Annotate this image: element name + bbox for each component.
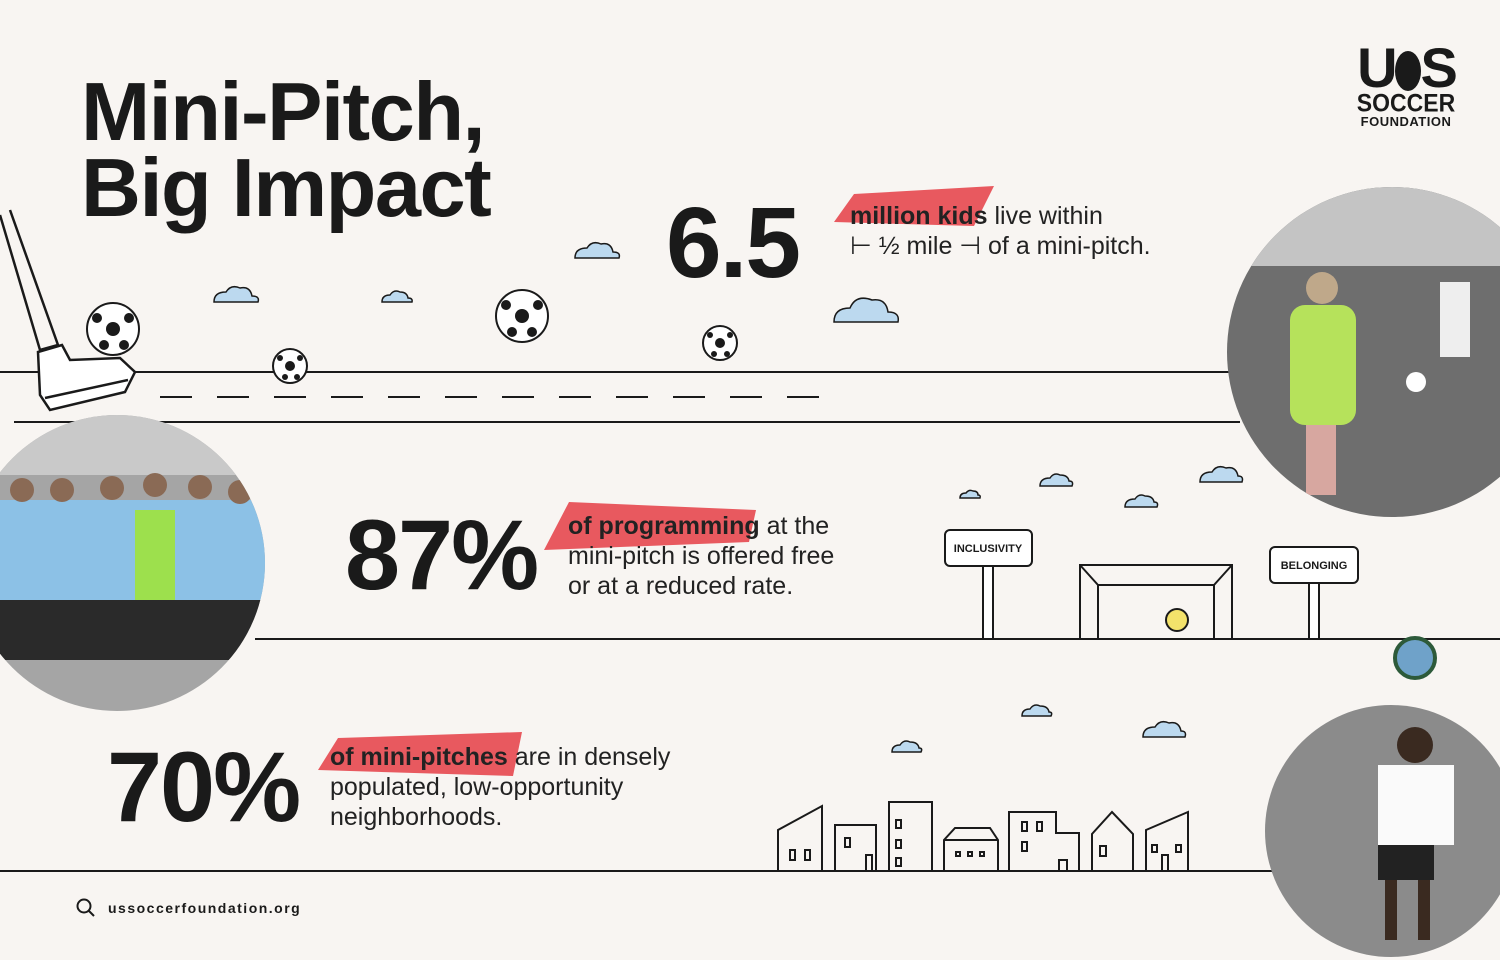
photo: girls playing	[1226, 186, 1500, 518]
footer url: ussoccerfoundation.org	[108, 900, 301, 916]
stat 1: 6.5	[666, 187, 799, 299]
stat 3	[107, 731, 670, 842]
stat 1	[666, 186, 1151, 299]
stat 1: ⊢ ½ mile ⊣ of a mini-pitch.	[850, 232, 1151, 260]
logo: FOUNDATION	[1361, 114, 1451, 129]
leg and shoe	[0, 210, 135, 410]
background line art: BELONGING	[1281, 560, 1347, 572]
small ball badge	[1395, 638, 1435, 678]
logo: SOCCER	[1357, 89, 1455, 117]
stat 3: 70%	[107, 731, 299, 842]
photo: team group	[0, 415, 265, 711]
signs and goal	[945, 530, 1358, 639]
stat 3: populated, low-opportunity	[330, 773, 623, 801]
icon: clouds	[214, 243, 1242, 752]
stat 2: 87%	[345, 499, 537, 610]
title: Mini-Pitch,	[81, 65, 484, 158]
logo	[1357, 40, 1456, 129]
title: Big Impact	[81, 141, 490, 234]
title	[81, 65, 491, 234]
stat 3: neighborhoods.	[330, 803, 502, 831]
stat 2: of programming at the	[568, 512, 829, 540]
stat 3: of mini-pitches are in densely	[330, 743, 670, 771]
buildings	[778, 802, 1188, 871]
photo: boy with ball	[1265, 705, 1500, 960]
icon: soccer balls	[87, 290, 737, 383]
background line art: INCLUSIVITY	[954, 543, 1023, 555]
stat 2: mini-pitch is offered free	[568, 542, 834, 570]
stat 2: or at a reduced rate.	[568, 572, 793, 600]
stat 2	[345, 499, 834, 610]
stat 1: million kids live within	[850, 202, 1103, 230]
